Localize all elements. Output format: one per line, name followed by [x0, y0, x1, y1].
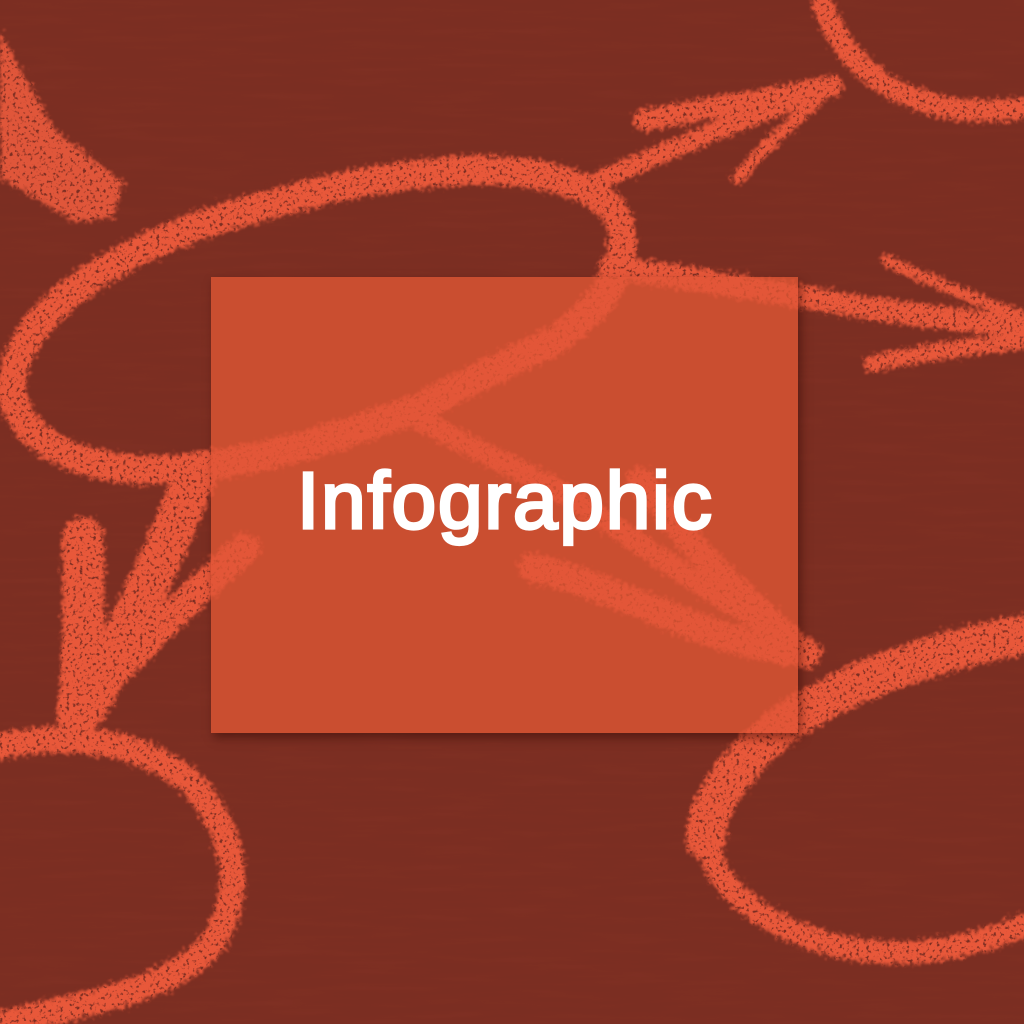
chalk circle: top-right [822, 0, 1024, 111]
chalk shape: top-left arrow tip [0, 32, 124, 222]
chalk arrow: down-right [422, 420, 808, 654]
panel: title card [211, 277, 798, 733]
chalk arrow: down-left [78, 478, 245, 715]
chalk ellipse: bottom-right [706, 635, 1024, 952]
title: Infographic [297, 456, 714, 545]
chalk ellipse: main [12, 170, 622, 470]
chalk arrow: right [610, 260, 1024, 364]
chalk arrow: up-right [600, 86, 832, 180]
chalk circle: bottom-left [0, 740, 232, 1024]
